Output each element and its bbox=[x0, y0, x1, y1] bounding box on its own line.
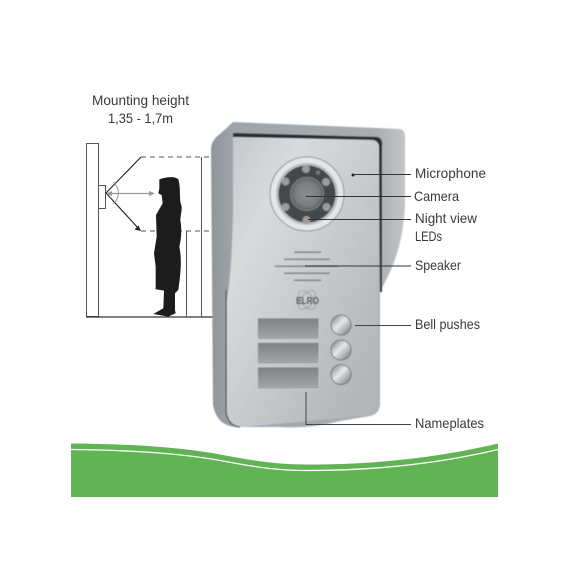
ELRO logo: ELRO bbox=[296, 296, 319, 307]
title: mounting height bbox=[92, 92, 189, 126]
hood and rear housing bbox=[211, 122, 405, 427]
green wave band bbox=[71, 444, 498, 497]
diagram: mounting height with person bbox=[86, 144, 222, 317]
callout: bell pushes: Bell pushes bbox=[415, 316, 480, 332]
title: mounting height: Mounting height bbox=[92, 92, 189, 108]
callout: microphone: Microphone bbox=[415, 165, 486, 181]
callout: nameplates: Nameplates bbox=[415, 415, 484, 431]
callout: nameplates bbox=[306, 392, 484, 431]
callout: speaker: Speaker bbox=[415, 257, 461, 273]
title: mounting height: 1,35 - 1,7m bbox=[108, 110, 173, 126]
nameplates bbox=[258, 318, 319, 389]
callout: bell pushes bbox=[355, 316, 480, 332]
camera module bbox=[270, 157, 344, 231]
callout: night view LEDs bbox=[308, 210, 478, 244]
callout: microphone bbox=[352, 165, 486, 181]
bell push buttons bbox=[331, 315, 351, 384]
faceplate bbox=[227, 137, 379, 427]
speaker slits bbox=[275, 252, 338, 281]
callout: night view LEDs: LEDs bbox=[415, 228, 442, 244]
callout: night view LEDs: Night view bbox=[415, 210, 478, 226]
inner shadow of hood bbox=[233, 133, 382, 292]
ELRO logo bbox=[295, 288, 319, 312]
person silhouette bbox=[153, 177, 182, 317]
device: door station bbox=[211, 122, 405, 427]
callout: camera: Camera bbox=[414, 188, 459, 204]
